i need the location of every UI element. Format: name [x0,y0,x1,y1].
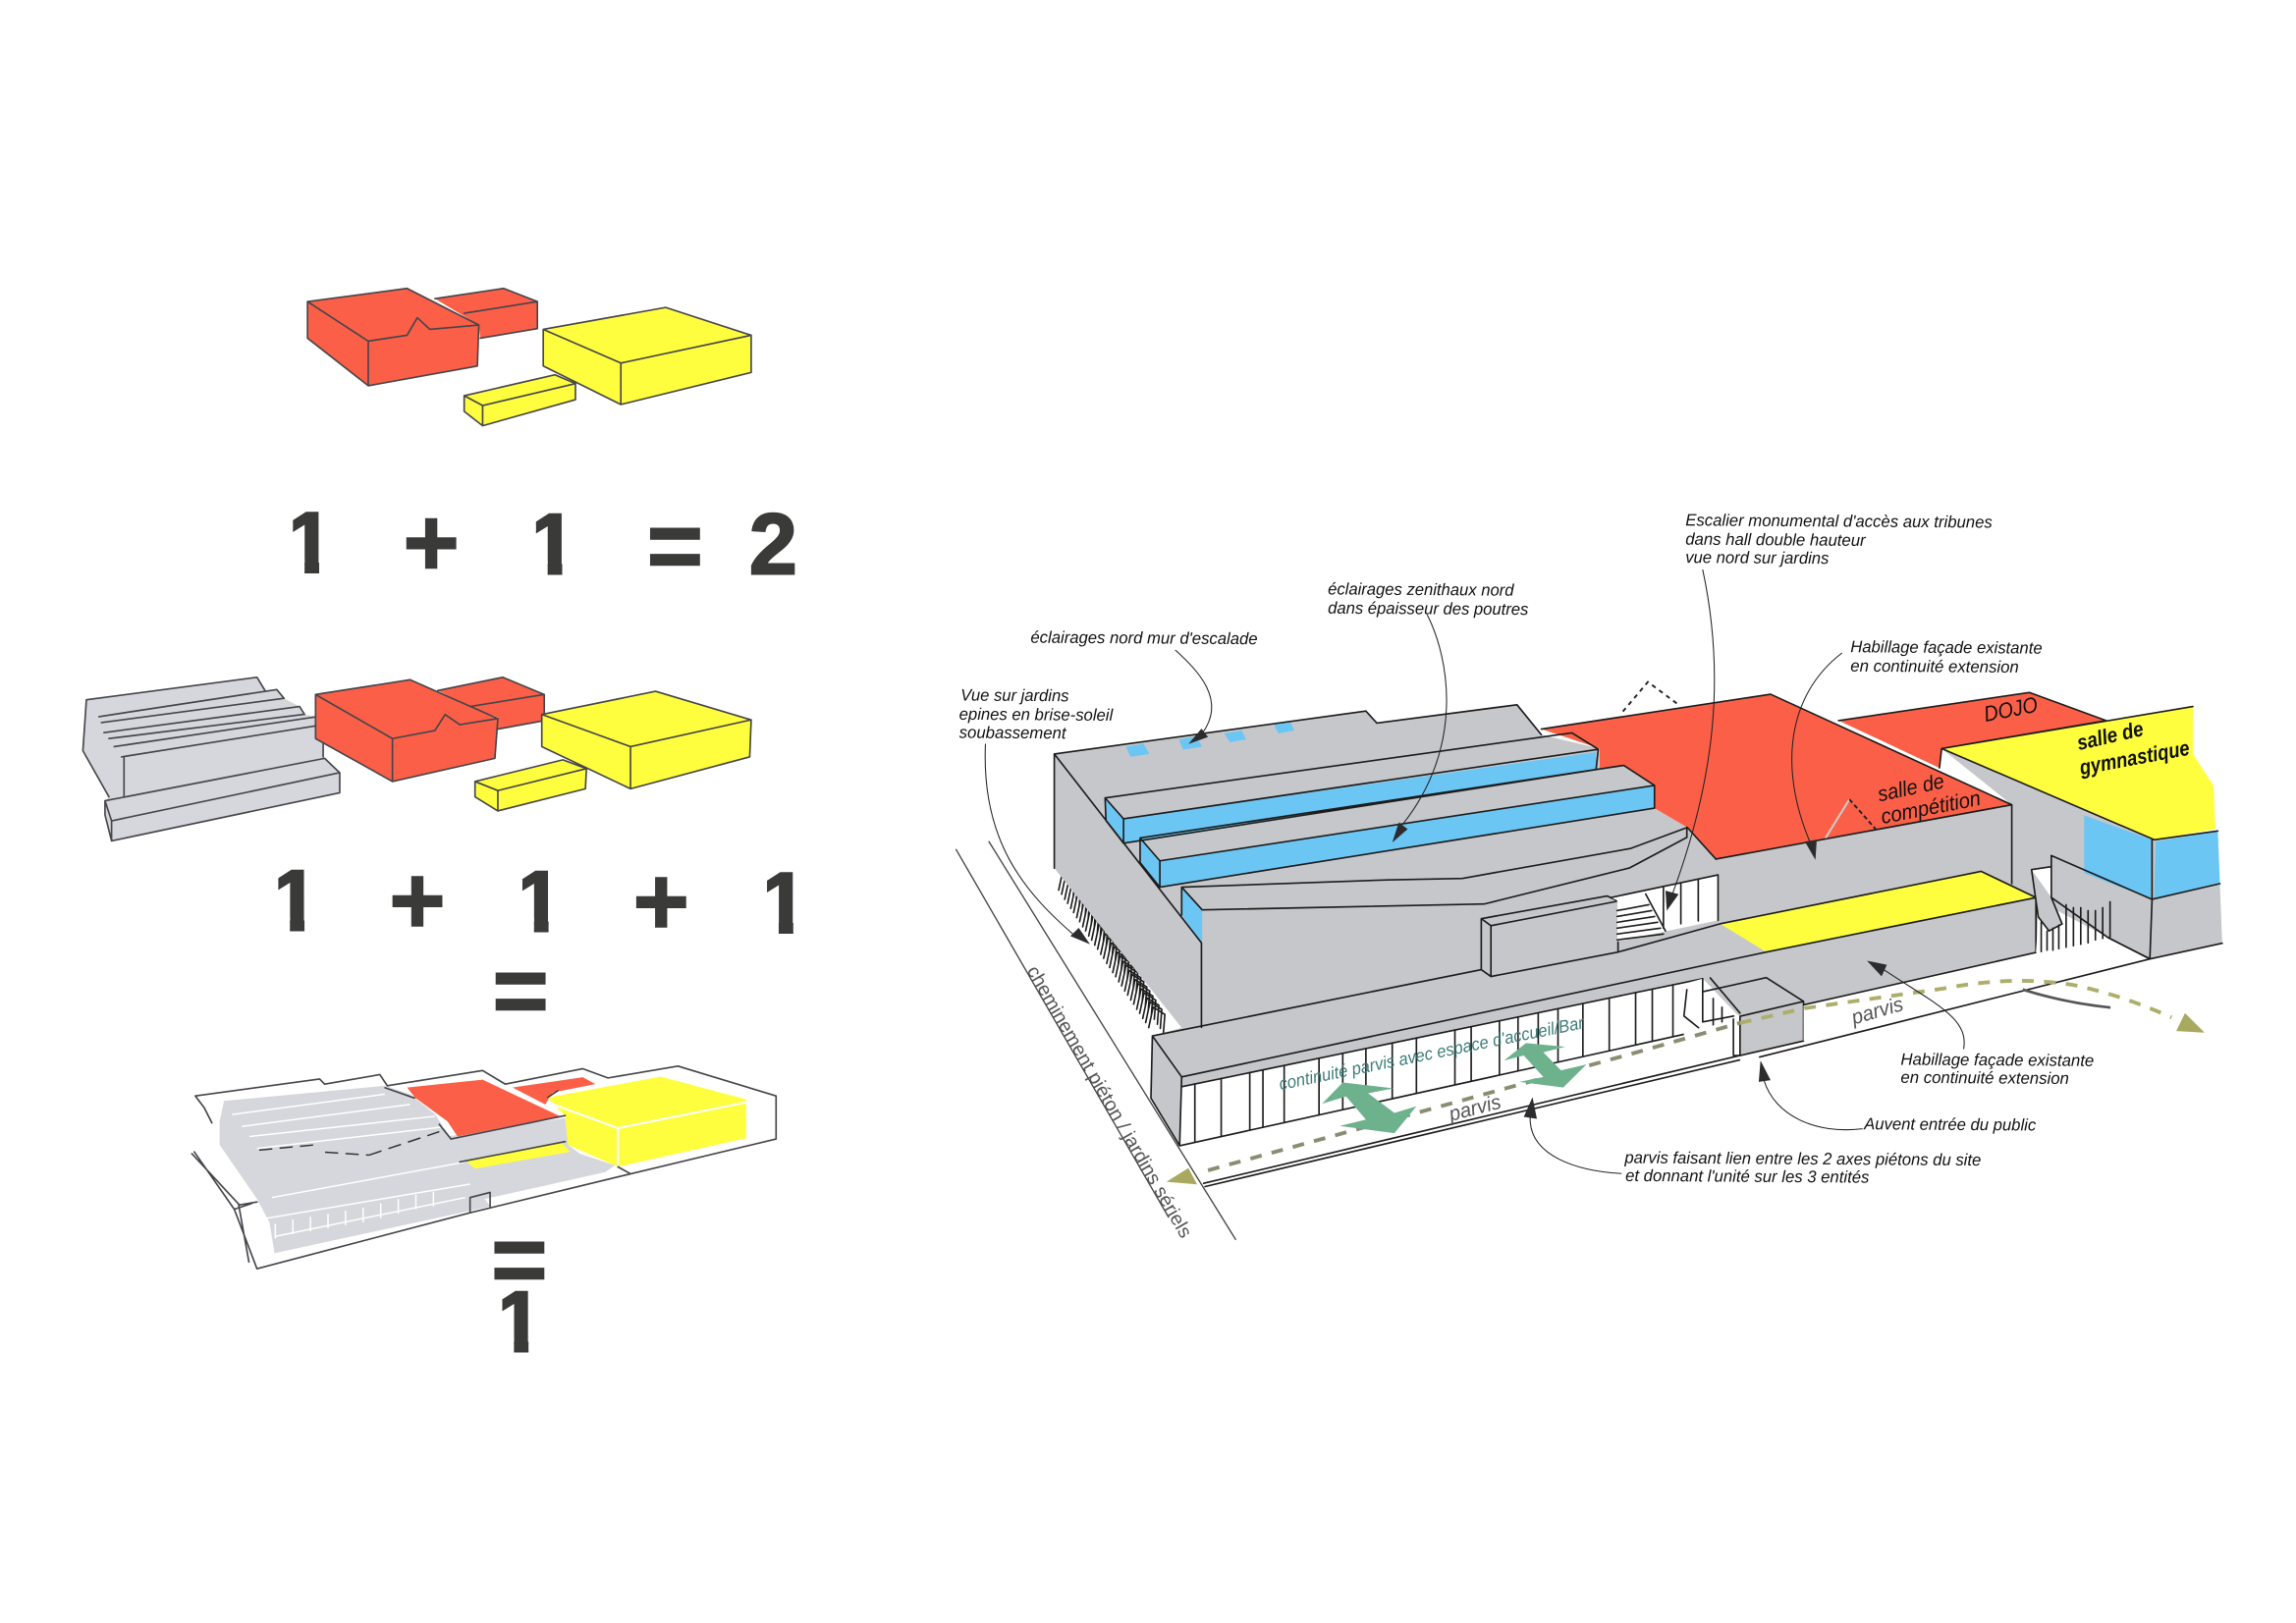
annotation: parvis faisant lien [1623,1148,1981,1187]
leader: habillage haut [1792,653,1842,860]
room label: salle de gymnastique: salle de [2074,716,2146,755]
annotation: éclairages zenithaux: dans épaisseur des poutres [1328,599,1529,619]
roof beams and building outlines [1055,705,1716,1027]
building body [1055,705,2036,1146]
parvis white band [1204,938,2150,1187]
annotation: parvis faisant lien: et donnant l'unité sur les 3 entités [1625,1166,1870,1187]
leader: parvis [1524,1098,1621,1173]
equation: 1 + 1 = 2: = [647,492,703,600]
sketch: three separate volumes [82,677,751,840]
equation: 1 + 1 = 2 [293,512,795,575]
stair and hatching at gymnasium [2032,855,2152,959]
green double arrow 1 [1322,1082,1416,1133]
leader: vue sur jardins [985,743,1090,945]
sketch: unified building [191,1066,776,1269]
leader: escalier [1666,569,1715,910]
label: continuité parvis: continuité parvis avec espace d'accueil/Bar [1278,1012,1586,1094]
room label: salle de compétition: salle de [1876,769,1946,806]
room label: DOJO: DOJO [1982,692,2040,727]
equation: 1 + 1 + 1 =: + [632,846,689,954]
yellow roof: salle de gymnastique [1941,707,2215,839]
annotation: vue sur jardins: soubassement [959,723,1067,742]
equation: = 1: 1 [495,1272,543,1370]
equation: 1 + 1 = 2: + [403,488,460,596]
label: parvis right: parvis [1848,993,1906,1030]
equation: 1 + 1 + 1 =: = [492,936,549,1044]
yellow strip roof [1721,871,2036,952]
equation: = 1 [494,1241,544,1353]
annotation: habillage façade haut: en continuité extension [1850,657,2019,676]
glazed double height hall with stairs [1611,875,1718,942]
label: cheminement piéton: cheminement piéton / jardins sériels [1022,962,1196,1242]
sketch: two separate volumes [307,289,751,426]
annotation: vue sur jardins [959,685,1115,742]
equation: = 1: = [491,1206,548,1314]
blue skylights [1105,722,2219,944]
room label: salle de gymnastique [2074,716,2191,780]
annotation: vue sur jardins: epines en brise-soleil [959,705,1115,725]
main building axonometric [1055,682,2222,1187]
leader: habillage bas [1867,960,1964,1050]
equation: 1 + 1 + 1 =: 1 [271,852,319,949]
annotation: escalier monumental: dans hall double hauteur [1685,530,1867,550]
room label: salle de compétition [1876,769,1983,829]
equation: 1 + 1 = 2: 1 [528,495,576,592]
annotation: escalier monumental [1685,511,1993,568]
hidden roof profile, dashed [1623,682,1876,838]
brise-soleil fins [1056,867,1181,1034]
room label: salle de compétition: compétition [1879,785,1983,829]
annotation: escalier monumental: vue nord sur jardins [1685,548,1830,568]
annotation: habillage façade haut: Habillage façade existante [1850,637,2043,658]
facade panel [1481,896,1618,977]
equation: 1 + 1 + 1 =: 1 [515,852,563,949]
annotation: habillage façade haut [1850,637,2043,676]
site path lines [956,841,1235,1240]
lower volume edges and yellow strip outlines [1151,871,2036,1146]
label: parvis left: parvis [1446,1091,1503,1126]
annotation: escalier monumental: Escalier monumental d'accès aux tribunes [1685,511,1993,531]
leader: auvent [1759,1060,1863,1130]
equation: 1 + 1 + 1 =: 1 [760,854,808,951]
red roof: dojo [1838,692,2106,768]
annotation: vue sur jardins: Vue sur jardins [960,685,1069,705]
green double arrow 2 [1503,1043,1586,1088]
red roof: salle de compétition [1542,694,2012,859]
equation: 1 + 1 = 2: 2 [749,495,797,592]
annotation: habillage façade bas [1900,1050,2094,1088]
annotation: auvent: Auvent entrée du public [1863,1114,2037,1134]
glazing mullions [1195,985,1673,1142]
annotation: habillage façade bas: Habillage façade existante [1900,1050,2094,1070]
pedestrian route dashed arrow [1167,981,2205,1184]
gymnasium body [1941,748,2222,959]
annotation: éclairages zenithaux [1328,579,1529,619]
annotation: éclairages zenithaux: éclairages zenithaux nord [1328,579,1514,600]
leader: éclairages nord [1175,650,1212,744]
public entrance canopy [1684,978,1804,1055]
annotation: habillage façade bas: en continuité extension [1900,1068,2069,1088]
equation: 1 + 1 + 1 =: + [389,846,446,954]
leader: éclairages zenithaux [1393,615,1447,842]
equation: 1 + 1 = 2: 1 [286,494,334,591]
full diagram canvas [82,287,2223,1353]
equation: 1 + 1 + 1 = [278,870,793,1011]
room label: salle de gymnastique: gymnastique [2077,735,2191,780]
annotation: parvis faisant lien: parvis faisant lien entre les 2 axes piétons du site [1623,1148,1981,1169]
annotation: éclairages nord: éclairages nord mur d'escalade [1030,628,1258,648]
